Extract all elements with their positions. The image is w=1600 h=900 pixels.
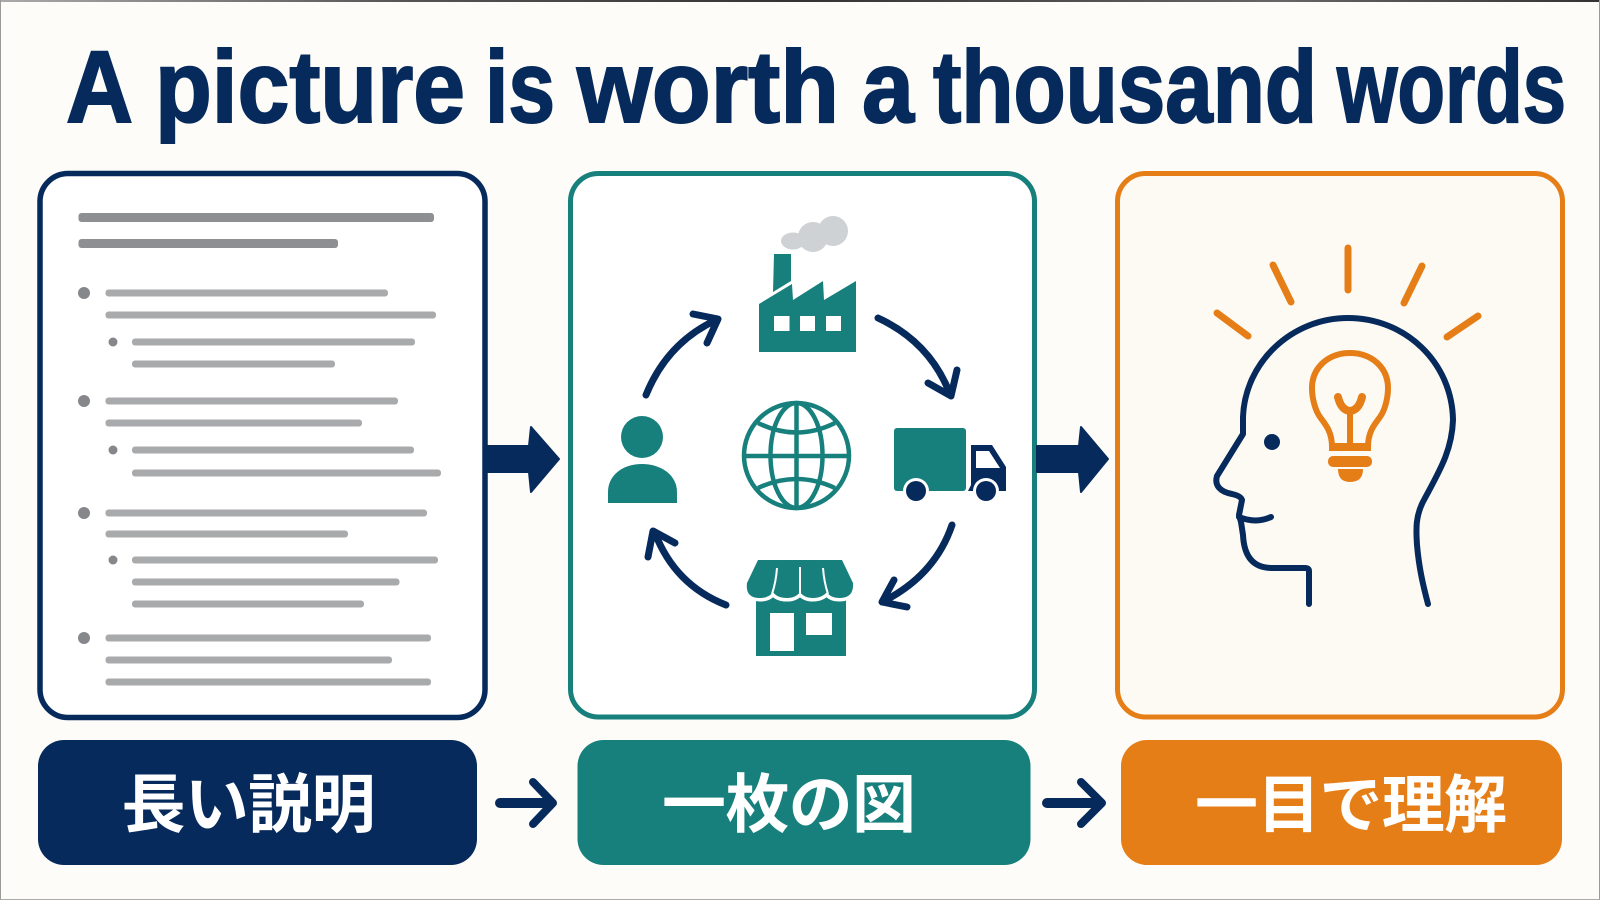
small arrow 2 [1047, 782, 1102, 824]
cycle arrow: truck to store [882, 525, 952, 607]
label: long explanation [38, 740, 477, 865]
small arrow 1 [500, 782, 553, 824]
icon: head profile [1216, 318, 1453, 604]
title: worth [576, 30, 839, 144]
icon: light bulb [1312, 353, 1388, 482]
title [66, 30, 1566, 144]
icon: factory [759, 216, 856, 352]
icon: eye [1264, 434, 1280, 450]
icon: globe [744, 403, 849, 508]
cycle arrow: person to factory [646, 314, 718, 395]
panel: understanding at a glance [1118, 174, 1562, 717]
title: thousand [933, 30, 1317, 144]
panel: one diagram [570, 174, 1034, 717]
panel: long text document [40, 174, 485, 718]
title: picture [155, 30, 465, 144]
icon: store [747, 560, 853, 656]
cycle arrow: store to person [648, 531, 726, 605]
title: a [862, 30, 915, 144]
icon: person [608, 416, 677, 503]
title: is [485, 30, 555, 144]
title: A [66, 30, 133, 144]
label: one diagram: 一枚の図 [662, 769, 916, 841]
label: understand at a glance: 一目で理解 [1195, 771, 1507, 841]
arrow: diagram to understanding [1037, 427, 1108, 492]
arrow: text to diagram [487, 427, 559, 492]
icon: light rays [1217, 248, 1478, 337]
heading lines [78, 213, 434, 248]
label: long explanation: 長い説明 [122, 769, 376, 841]
bullet list lines [78, 287, 441, 686]
label: one diagram [578, 740, 1030, 865]
cycle arrow: factory to truck [878, 318, 957, 396]
label: understand at a glance [1121, 740, 1562, 865]
icon: truck [894, 428, 1006, 504]
